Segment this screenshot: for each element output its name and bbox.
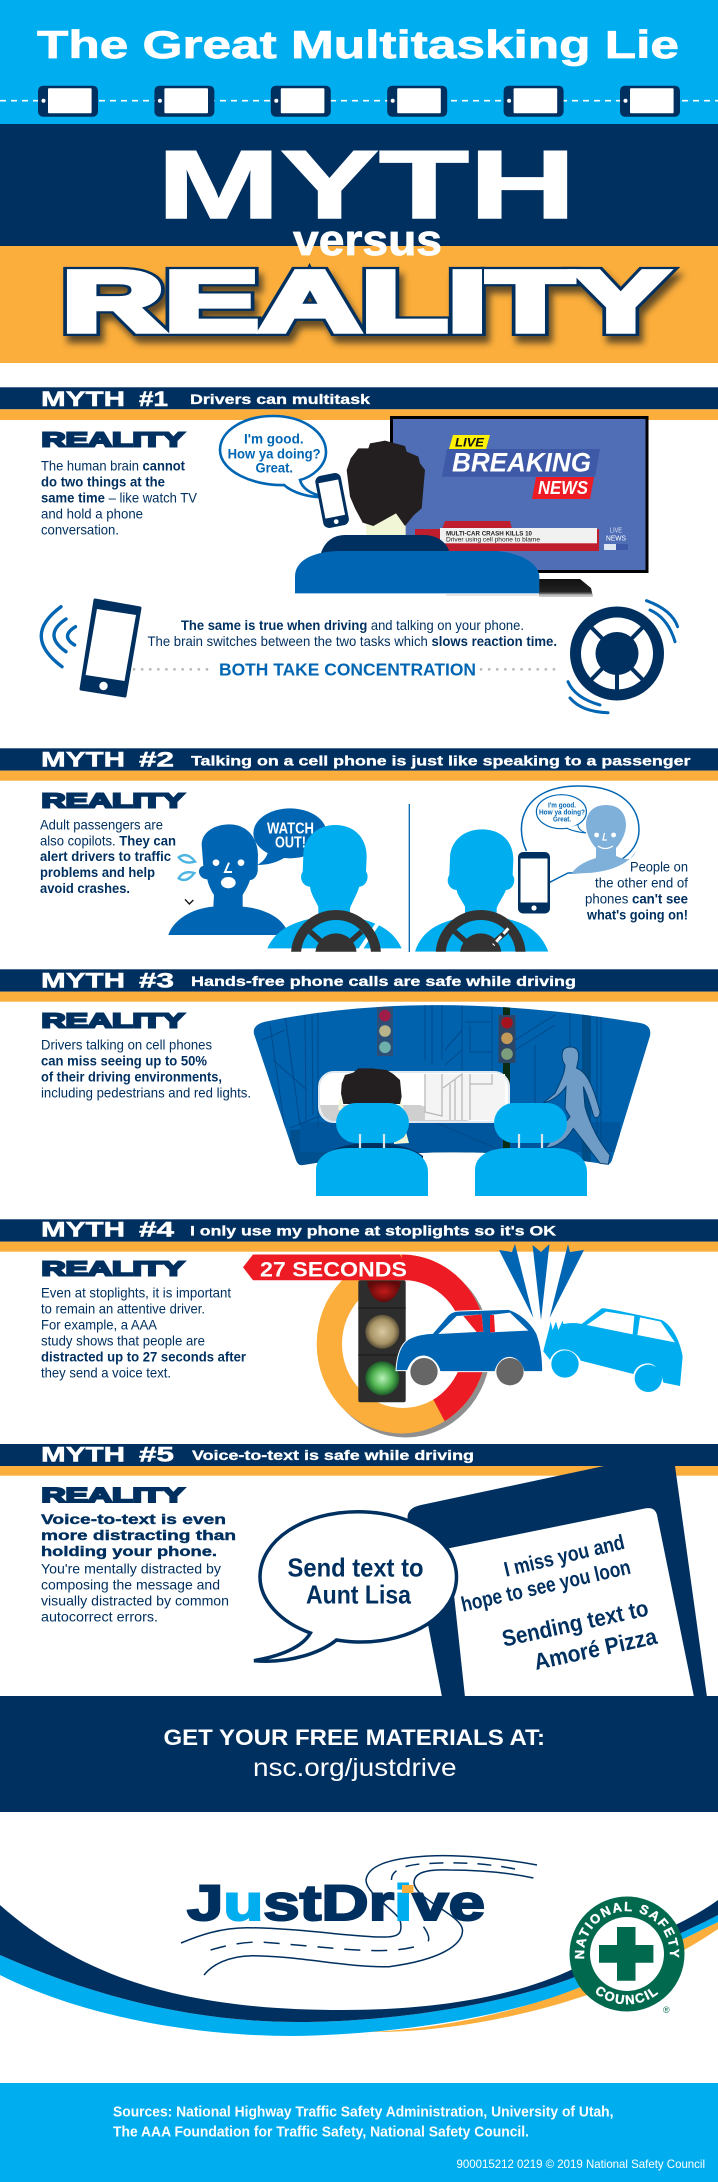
- myth 1 header bar: Drivers can multitask: [190, 391, 370, 407]
- icon: phone at ear: [314, 472, 350, 529]
- panel: orange reality band: [0, 246, 718, 363]
- figure: driver with passenger: [267, 825, 402, 952]
- icon: impact spikes: [499, 1244, 584, 1320]
- text: people on the other end: People on: [630, 859, 688, 875]
- banner: 27 seconds: [243, 1254, 412, 1282]
- chart: 27 second ring: [317, 1254, 491, 1438]
- seats: [316, 1103, 587, 1196]
- logo: National Safety Council seal: ®: [663, 2005, 670, 2015]
- logo: National Safety Council seal: NATIONAL SAFETY: [574, 1902, 680, 1959]
- speech bubble: send text to Aunt Lisa: Send text to: [288, 1553, 424, 1583]
- sources text: Sources: National Highway Traffic Safety Administration, University of Utah,: [113, 2104, 614, 2121]
- speech bubble: I'm good: How ya doing?: [228, 445, 321, 461]
- icon: sweat drops: [179, 855, 195, 904]
- link text: nsc.org/justdrive: [253, 1754, 456, 1782]
- person watching tv: [295, 441, 539, 593]
- reality body text: Even at stoplights, it is important: [41, 1285, 231, 1301]
- sources text: The AAA Foundation for Traffic Safety, National Safety Council.: [113, 2124, 529, 2141]
- reality label: REALITY: [42, 1258, 185, 1281]
- icon: light blue car: [543, 1308, 683, 1395]
- copyright: 900015212 0219 © 2019 National Safety Council: [456, 2157, 705, 2171]
- myth 2 header bar: [0, 748, 718, 781]
- myth 4 header bar: #4: [139, 1219, 174, 1242]
- reality body text: also copilots. They can: [40, 832, 176, 848]
- heading: REALITY: REALITY: [66, 261, 672, 357]
- reality body text: The human brain cannot: [41, 458, 185, 474]
- logo: Just Drive with road: [181, 1856, 537, 1975]
- myth 5 header bar: [0, 1444, 718, 1476]
- myth 5 header bar: Voice-to-text is safe while driving: [192, 1447, 474, 1463]
- panel: myth 3: [0, 969, 718, 1196]
- heading: versus: versus: [293, 216, 442, 265]
- speech bubble: I'm good: Great.: [256, 460, 293, 476]
- tv with breaking news: Driver using cell phone to blame: [446, 537, 540, 544]
- myth 4 header bar: [0, 1219, 718, 1252]
- myth 1 header bar: #1: [139, 388, 168, 411]
- callout: both take concentration: BOTH TAKE CONCENTRATION: [219, 660, 476, 680]
- speech bubble: send text to Aunt Lisa: Aunt Lisa: [306, 1579, 411, 1609]
- myth 4 header bar: MYTH: [41, 1219, 125, 1242]
- text: people on the other end: [585, 859, 688, 922]
- icon: vibrating phone: [41, 600, 140, 696]
- tv with breaking news: LIVE: [610, 528, 622, 535]
- logo: Just Drive with road: JustDr ive: [187, 1875, 485, 1931]
- myth 3 header bar: Hands-free phone calls are safe while driving: [191, 973, 576, 989]
- reality body text: of their driving environments,: [41, 1068, 222, 1084]
- icon: shaking steering wheel: [568, 601, 678, 713]
- speech bubble: watch out: OUT!: [275, 835, 306, 852]
- reality body text: Drivers talking on cell phones: [41, 1036, 212, 1052]
- tv with breaking news: LIVE: [455, 436, 485, 450]
- tv with breaking news: NEWS: [538, 478, 588, 498]
- reality body text: [41, 1511, 236, 1625]
- panel: call to action: [0, 1696, 718, 1812]
- reality body text: conversation.: [41, 522, 119, 538]
- large phone with voice-to-text screen: hope to see you loon: [459, 1556, 633, 1617]
- reality body text: [41, 458, 198, 538]
- figure: passenger: [168, 824, 286, 935]
- title: The Great Multitasking Lie: [37, 24, 679, 67]
- swoosh road bands: [0, 1900, 718, 2036]
- divider: [408, 804, 410, 952]
- tv with breaking news: BREAKING: [452, 448, 591, 478]
- speech bubble: I'm good: [220, 416, 326, 497]
- reality body text: holding your phone.: [41, 1543, 217, 1559]
- reality body text: For example, a AAA: [41, 1317, 158, 1333]
- panel: cyan title band: [0, 0, 718, 124]
- panel: navy myth band: [0, 124, 718, 246]
- tv with breaking news: MULTI-CAR CRASH KILLS 10: [446, 530, 532, 538]
- reality body text: Adult passengers are: [40, 816, 163, 832]
- heading: REALITY: REALITY: [62, 254, 668, 350]
- thought bubble: person on other end of phone: Great.: [553, 817, 571, 824]
- reality body text: [41, 1036, 251, 1100]
- text: same is true when driving: The same is true when driving and talking on your phone.: [181, 617, 524, 633]
- tv with breaking news: NEWS: [606, 534, 626, 542]
- reality body text: [41, 1285, 247, 1381]
- panel: myth 5: [0, 1444, 718, 1697]
- windshield street scene: [250, 1000, 660, 1170]
- sources text: [113, 2104, 614, 2141]
- figure: driver on phone: [415, 829, 548, 952]
- myth 3 header bar: [0, 969, 718, 1002]
- reality label: REALITY: [42, 1009, 185, 1032]
- speech bubble: watch out: [253, 808, 327, 865]
- reality body text: distracted up to 27 seconds after: [41, 1349, 247, 1365]
- reality body text: can miss seeing up to 50%: [41, 1052, 208, 1068]
- reality body text: same time – like watch TV: [41, 490, 198, 506]
- reality label: REALITY: [42, 1484, 185, 1507]
- logo: National Safety Council seal: COUNCIL: [596, 1986, 658, 2005]
- reality body text: Voice-to-text is even: [41, 1511, 226, 1527]
- thought bubble: person on other end of phone: How ya doing?: [539, 810, 585, 817]
- icon: dark blue car: [396, 1309, 543, 1385]
- logo: National Safety Council seal: [570, 1896, 684, 2015]
- reality label: REALITY: [42, 789, 185, 812]
- text: people on the other end: the other end of: [595, 874, 688, 890]
- heading: get your free materials: GET YOUR FREE MATERIALS AT:: [164, 1725, 545, 1750]
- myth 3 header bar: #3: [139, 969, 174, 992]
- reality body text: study shows that people are: [41, 1333, 205, 1349]
- speech bubble: I'm good: I'm good.: [244, 430, 304, 446]
- reality label: REALITY: [42, 429, 185, 452]
- icon: phone: [518, 852, 550, 914]
- reality body text: including pedestrians and red lights.: [41, 1084, 251, 1100]
- rear-view mirror: [319, 1068, 509, 1122]
- tv with breaking news: [392, 418, 647, 597]
- banner: 27 seconds: 27 SECONDS: [260, 1259, 407, 1282]
- panel: myth 1: [0, 387, 718, 713]
- heading: REALITY: [62, 254, 672, 357]
- figure: pedestrian: [543, 1047, 610, 1164]
- panel: myth 4: [0, 1219, 718, 1438]
- large phone with voice-to-text screen: Amoré Pizza: [532, 1623, 659, 1675]
- reality body text: and hold a phone: [41, 506, 143, 522]
- large phone with voice-to-text screen: Sending text to: [500, 1595, 651, 1652]
- myth 3 header bar: MYTH: [41, 969, 125, 992]
- large phone with voice-to-text screen: I miss you and: [502, 1531, 627, 1582]
- myth 2 header bar: MYTH: [41, 749, 125, 772]
- text: same is true when driving: [148, 617, 557, 649]
- large phone with voice-to-text screen: [407, 1466, 707, 1697]
- speech bubble: watch out: WATCH: [267, 820, 314, 837]
- icon: traffic light: [358, 1280, 406, 1402]
- myth 2 header bar: Talking on a cell phone is just like speaking to a passenger: [191, 752, 691, 768]
- reality body text: more distracting than: [41, 1527, 236, 1543]
- thought bubble: person on other end of phone: I'm good.: [548, 803, 576, 810]
- reality body text: avoid crashes.: [40, 880, 130, 896]
- reality body text: alert drivers to traffic: [40, 848, 171, 864]
- reality body text: they send a voice text.: [41, 1365, 171, 1381]
- reality body text: composing the message and: [41, 1577, 220, 1593]
- heading: REALITY: REALITY: [62, 254, 668, 350]
- text: people on the other end: phones can't see: [585, 890, 688, 906]
- reality body text: You're mentally distracted by: [41, 1560, 221, 1576]
- reality body text: autocorrect errors.: [41, 1609, 158, 1625]
- reality body text: [40, 816, 176, 896]
- speech bubble: send text to Aunt Lisa: [254, 1512, 456, 1661]
- myth 5 header bar: #5: [139, 1444, 174, 1467]
- reality body text: problems and help: [40, 864, 155, 880]
- row of phone icons on dashed line: [0, 86, 718, 117]
- text: same is true when driving: The brain switches between the two tasks which slows reaction time.: [148, 633, 557, 649]
- thought bubble: person on other end of phone: [521, 786, 639, 883]
- panel: sources footer: [0, 2083, 718, 2182]
- panel: myth 2: [0, 748, 718, 952]
- reality body text: visually distracted by common: [41, 1593, 229, 1609]
- text: people on the other end: what's going on!: [586, 906, 688, 922]
- heading: MYTH: MYTH: [157, 130, 576, 239]
- myth 1 header bar: MYTH: [41, 388, 125, 411]
- reality body text: to remain an attentive driver.: [41, 1301, 205, 1317]
- myth 2 header bar: #2: [139, 749, 174, 772]
- myth 4 header bar: I only use my phone at stoplights so it's OK: [190, 1222, 556, 1238]
- myth 1 header bar: [0, 387, 718, 420]
- myth 5 header bar: MYTH: [41, 1444, 125, 1467]
- reality body text: do two things at the: [41, 474, 165, 490]
